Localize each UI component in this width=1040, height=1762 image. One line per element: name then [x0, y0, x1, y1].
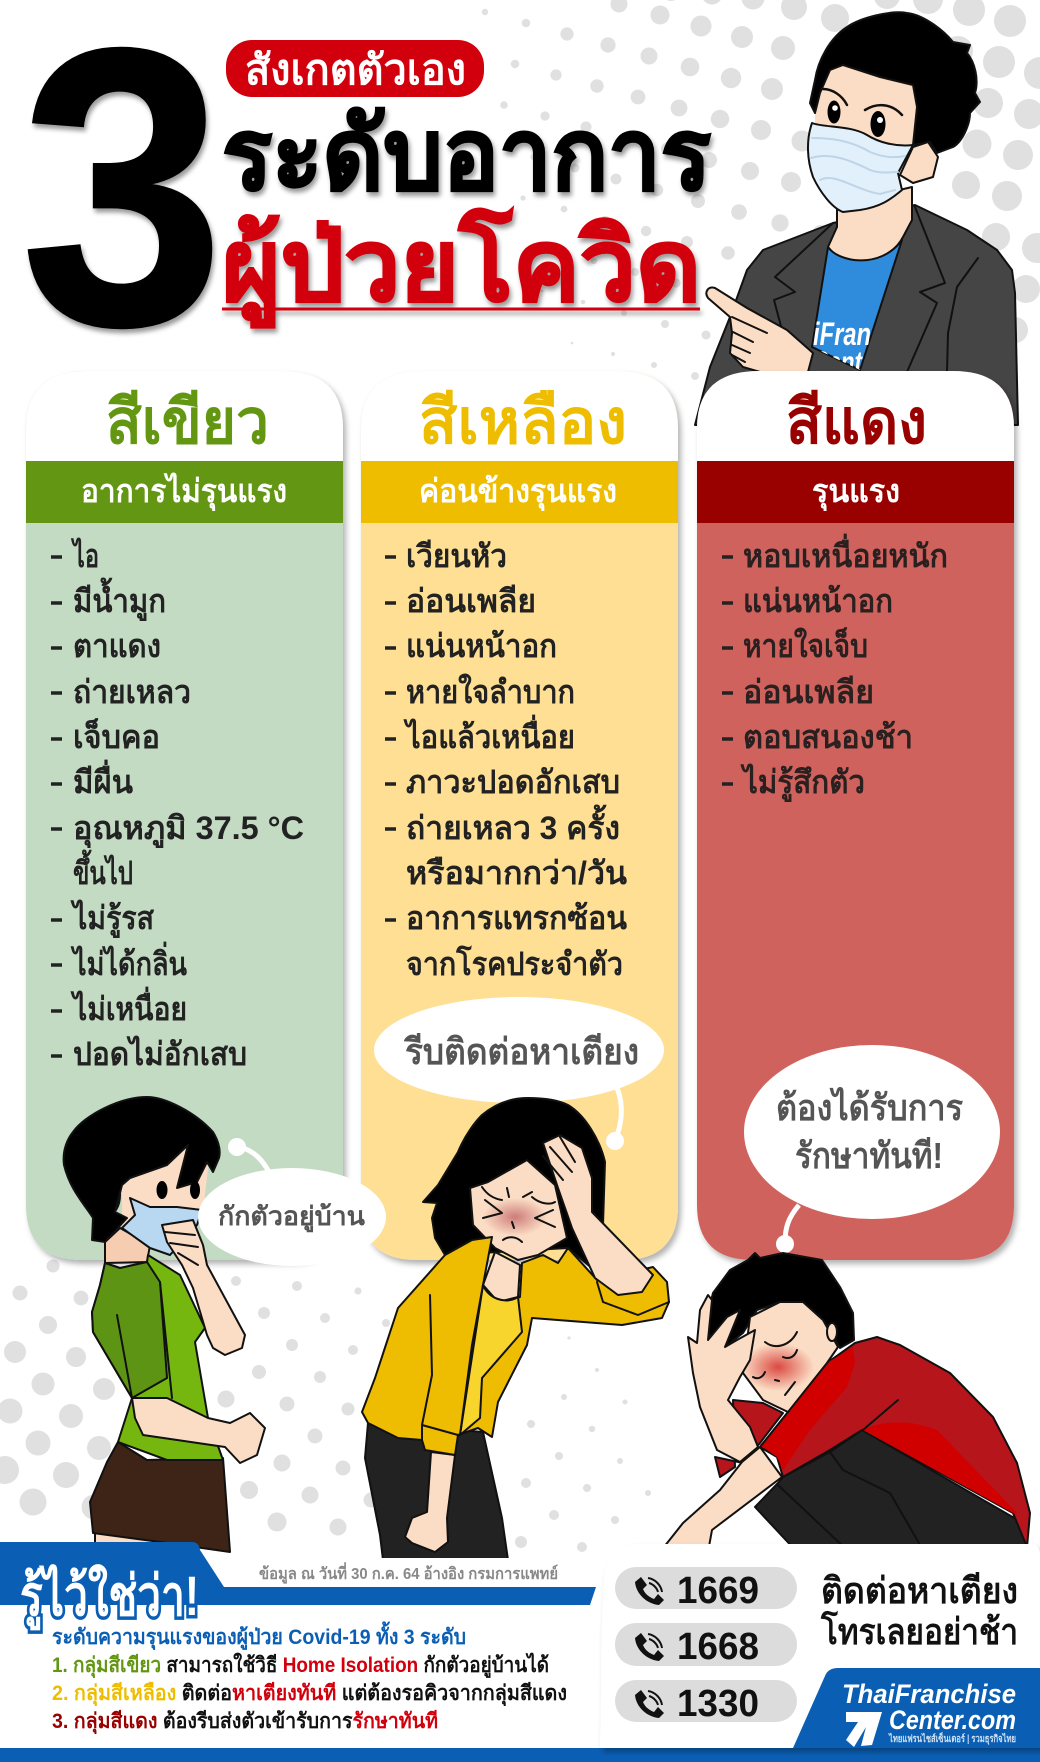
panel: green level [26, 371, 343, 1260]
yellow symptom list: ไอแล้วเหนื่อย [403, 714, 575, 755]
yellow symptom list: หายใจลำบาก [406, 673, 575, 710]
mask [122, 1198, 202, 1255]
green symptom list: มีน้ำมูก [73, 577, 166, 622]
shirt logo text: iFran [813, 316, 871, 352]
severity summary list: 3. กลุ่มสีแดง ต้องรีบส่งตัวเข้ารับการรักษาทันที [52, 1709, 438, 1735]
severity summary list: 1. กลุ่มสีเขียว สามารถใช้วิธี Home Isolation กักตัวอยู่บ้านได้ [52, 1652, 549, 1679]
hotline 1669 [615, 1567, 797, 1612]
yellow symptom list: ภาวะปอดอักเสบ [406, 764, 620, 800]
logo: ThaiFranchise Center: Center.com [889, 1705, 1016, 1735]
severity summary list [52, 1621, 567, 1735]
title line: covid patients: ผู้ป่วยโควิด [222, 207, 701, 328]
green heading: สีเขียว [106, 388, 269, 457]
severity summary list: 2. กลุ่มสีเหลือง ติดต่อหาเตียงทันที แต่ต้องรอคิวจากกลุ่มสีแดง [52, 1681, 567, 1707]
green symptom list: มีผื่น [73, 759, 133, 800]
pointing hand [706, 288, 813, 372]
red heading: สีแดง [786, 388, 927, 457]
severity summary list: ระดับความรุนแรงของผู้ป่วย Covid-19 ทั้ง 3 ระดับ [52, 1621, 466, 1651]
green symptom list: ไม่รู้รส [70, 899, 154, 939]
title line: symptom levels: ระดับอาการ [222, 99, 711, 211]
green shirt [92, 1255, 223, 1460]
footer band [0, 1748, 1040, 1762]
face [122, 1140, 209, 1228]
hotline 1330 [615, 1680, 797, 1725]
leg [95, 1530, 165, 1550]
heading: good to know: รู้ไว้ใช่ว่า! [20, 1563, 199, 1631]
green symptom list: ขึ้นไป [73, 849, 133, 891]
red symptom list: หายใจเจ็บ [743, 626, 868, 664]
inner shirt [460, 1285, 522, 1435]
hand on forehead and arm [688, 1295, 758, 1462]
green symptom list: ถ่ายเหลว [73, 674, 191, 710]
green symptom list: ไม่ได้กลิ่น [70, 941, 187, 982]
speech bubble: urgent treatment [744, 1045, 1000, 1253]
neck [105, 1228, 150, 1263]
hair [64, 1097, 220, 1242]
logo: ThaiFranchise Center: ThaiFranchise [842, 1679, 1016, 1709]
yellow symptom list: หรือมากกว่า/วัน [406, 855, 627, 891]
yellow symptom list: อ่อนเพลีย [406, 583, 536, 619]
under shirt [715, 1400, 783, 1477]
source note background and text [190, 1558, 610, 1608]
yellow symptom list: แน่นหน้าอก [406, 628, 557, 664]
call to action [820, 1570, 1018, 1652]
call to action: โทรเลยอย่าช้า [820, 1610, 1018, 1652]
illustration: boy in green with mask [64, 1097, 265, 1552]
hanging arm [405, 1452, 455, 1552]
red symptom list: แน่นหน้าอก [743, 583, 893, 619]
face [743, 1302, 838, 1412]
yellow subheading band: ค่อนข้างรุนแรง [419, 473, 617, 512]
yellow heading: สีเหลือง [419, 388, 627, 457]
speech bubble: urgent treatment: รักษาทันที! [795, 1135, 943, 1176]
shirt logo text: Cent [812, 346, 864, 379]
t-shirt [812, 240, 902, 370]
green symptom list: ไม่เหนื่อย [70, 986, 187, 1027]
red subheading band: รุนแรง [812, 473, 900, 512]
eyes [156, 1181, 168, 1199]
hair [810, 12, 980, 153]
yellow symptom list: จากโรคประจำตัว [406, 945, 623, 982]
yellow jacket [362, 1237, 669, 1455]
neck [483, 1252, 520, 1302]
logo: ThaiFranchise Center [793, 1668, 1040, 1748]
green symptom list: ปอดไม่อักเสบ [73, 1035, 247, 1072]
shirt back [760, 1337, 1030, 1547]
speech bubble: find a bed: รีบติดต่อหาเตียง [403, 1031, 639, 1072]
trousers [365, 1423, 508, 1560]
green symptom list: อุณหภูมิ 37.5 °C [73, 810, 304, 849]
speech bubble: find a bed [374, 997, 664, 1150]
illustration: person in red crouching [660, 1253, 1030, 1552]
red symptom list: อ่อนเพลีย [743, 674, 874, 710]
reaching arm [660, 1447, 782, 1552]
yellow symptom list: ถ่ายเหลว 3 ครั้ง [406, 804, 620, 846]
green symptom list: ตาแดง [73, 628, 161, 664]
red symptom list: ตอบสนองช้า [743, 719, 913, 755]
raised hand [543, 1135, 653, 1295]
yellow symptom list [385, 538, 627, 982]
red subheading band [697, 461, 1014, 523]
speech bubble: urgent treatment: ต้องได้รับการ [776, 1086, 964, 1128]
speech bubble: stay home: กักตัวอยู่บ้าน [218, 1201, 365, 1233]
neck [828, 187, 912, 263]
yellow symptom list: อาการแทรกซ้อน [406, 900, 627, 936]
green subheading band: อาการไม่รุนแรง [81, 472, 287, 512]
illustration: woman in yellow jacket [362, 1098, 669, 1560]
footer: good-to-know panel [0, 1542, 620, 1750]
title pill: สังเกตตัวเอง [245, 46, 466, 93]
hotline 1330: 1330 [677, 1683, 759, 1725]
hand and raised arm [162, 1220, 245, 1355]
call to action: ติดต่อหาเตียง [821, 1570, 1018, 1611]
source note background and text: ข้อมูล ณ วันที่ 30 ก.ค. 64 อ้างอิง กรมการแพทย์ [259, 1562, 558, 1585]
panel: red level [697, 371, 1014, 1260]
hair [707, 1253, 854, 1348]
hotline 1668 [615, 1623, 797, 1668]
hair [423, 1098, 605, 1275]
illustration: man in mask pointing at title [695, 12, 1018, 425]
panel: hotlines [600, 1544, 1040, 1748]
trousers [755, 1430, 1027, 1552]
red symptom list: ไม่รู้สึกตัว [740, 763, 865, 803]
jacket [695, 205, 1018, 425]
lower arm and fist [132, 1398, 265, 1463]
panel: yellow level [361, 371, 678, 1260]
face [815, 60, 917, 150]
green subheading band [26, 461, 343, 523]
bright sleeve [760, 1347, 855, 1470]
yellow symptom list: เวียนหัว [406, 538, 507, 574]
ear [96, 1175, 120, 1215]
green symptom list: ไอ [71, 537, 99, 574]
green symptom list [51, 537, 304, 1072]
hotline 1669: 1669 [677, 1570, 759, 1612]
red symptom list: หอบเหนื่อยหนัก [743, 533, 948, 574]
face [470, 1160, 567, 1260]
yellow subheading band [361, 461, 678, 523]
shirt logo text [813, 322, 870, 370]
shorts [90, 1442, 230, 1552]
mask [808, 123, 913, 212]
red symptom list [722, 533, 948, 803]
speech bubble: stay home [198, 1138, 386, 1266]
green symptom list: เจ็บคอ [73, 717, 160, 755]
eyes [828, 100, 840, 124]
hotline 1668: 1668 [677, 1626, 759, 1668]
ear [900, 142, 938, 183]
